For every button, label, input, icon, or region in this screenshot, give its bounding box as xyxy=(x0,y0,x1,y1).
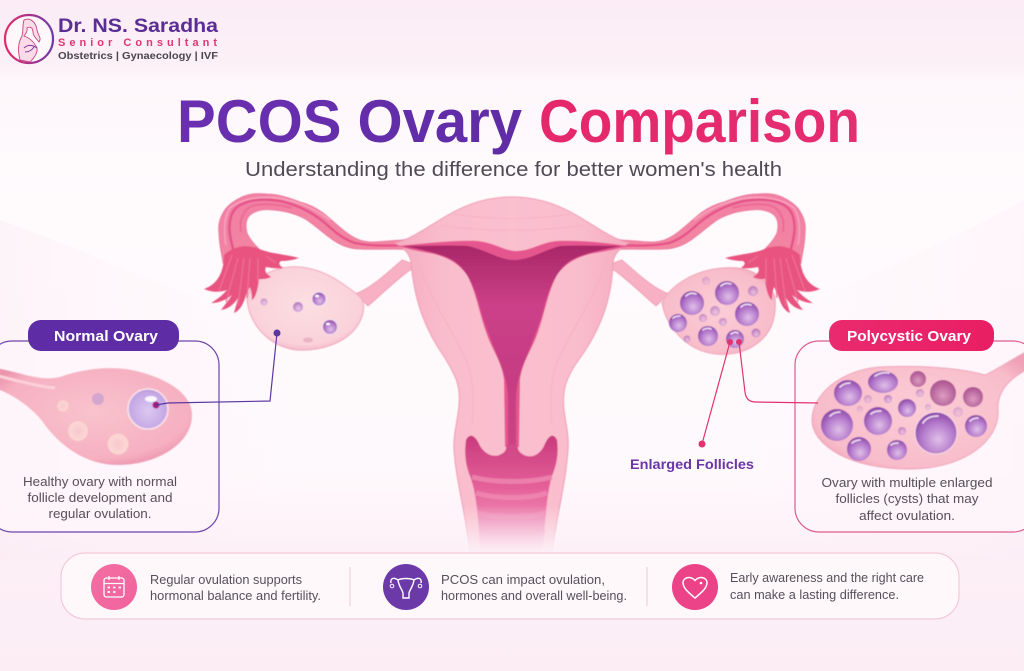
panel pill: Polycystic Ovary xyxy=(847,328,972,345)
bar background xyxy=(61,553,959,619)
enlarged polycystic ovary xyxy=(812,350,1024,469)
panel description: affect ovulation. xyxy=(859,509,955,523)
panel description: follicle development and xyxy=(28,491,173,505)
normal ovary panel xyxy=(0,320,219,532)
panel pill: Normal Ovary xyxy=(54,328,159,345)
item text xyxy=(730,571,924,602)
normal ovary connector xyxy=(156,330,280,405)
item text: PCOS can impact ovulation, xyxy=(441,573,605,587)
subtitle: Understanding the difference for better women's health xyxy=(245,158,782,181)
left ovarian ligament xyxy=(355,260,425,306)
cervix xyxy=(505,445,519,455)
logo emblem: mother xyxy=(5,15,53,63)
panel description: Ovary with multiple enlarged xyxy=(822,476,993,490)
panel frame xyxy=(795,341,1024,532)
divider xyxy=(646,567,648,606)
item text: Early awareness and the right care xyxy=(730,571,924,585)
endometrium band xyxy=(398,241,628,447)
item text xyxy=(150,573,321,603)
lower fade xyxy=(462,505,562,554)
polycystic ovary panel xyxy=(795,320,1024,532)
panel description: regular ovulation. xyxy=(48,507,152,521)
enlarged follicles connectors xyxy=(698,339,818,448)
enlarged normal ovary xyxy=(0,368,192,465)
logo specialties: Obstetrics | Gynaecology | IVF xyxy=(58,50,219,62)
right fallopian tube xyxy=(594,194,820,313)
logo xyxy=(5,15,219,63)
item text: can make a lasting difference. xyxy=(730,588,899,602)
item: PCOS impact xyxy=(383,564,627,610)
item text: Regular ovulation supports xyxy=(150,573,302,587)
follicles xyxy=(260,292,338,342)
uterus body with fundus xyxy=(395,197,629,552)
enlarged follicles label: Enlarged Follicles xyxy=(630,456,754,472)
item: regular ovulation xyxy=(91,564,321,610)
right ovarian ligament xyxy=(599,260,669,306)
item text xyxy=(441,573,627,603)
left fallopian tube xyxy=(204,194,430,313)
panel description: follicles (cysts) that may xyxy=(836,492,979,506)
uterus illustration xyxy=(395,197,629,554)
panel description xyxy=(23,475,177,521)
item: early awareness xyxy=(672,564,924,610)
panel description xyxy=(822,476,993,523)
bottom info bar xyxy=(61,553,959,619)
panel pill xyxy=(28,320,179,351)
vaginal canal xyxy=(465,436,558,552)
logo role: Senior Consultant xyxy=(58,37,217,49)
item text: hormonal balance and fertility. xyxy=(150,589,321,603)
icon: uterus xyxy=(383,564,429,610)
polycystic ovary on uterus xyxy=(662,268,775,354)
title: PCOS Ovary xyxy=(177,88,523,155)
logo name: Dr. NS. Saradha xyxy=(58,16,218,37)
title: Comparison xyxy=(539,88,860,155)
panel frame xyxy=(0,341,219,532)
icon: calendar xyxy=(91,564,137,610)
muscle lines xyxy=(418,214,606,425)
uterine cavity xyxy=(403,246,621,445)
ovary body xyxy=(662,268,775,354)
divider xyxy=(349,567,351,606)
vaginal folds xyxy=(472,477,552,533)
panel description: Healthy ovary with normal xyxy=(23,475,177,489)
item text: hormones and overall well-being. xyxy=(441,589,627,603)
ovary body xyxy=(247,267,364,350)
normal ovary on uterus xyxy=(247,267,364,350)
follicles xyxy=(669,277,760,348)
icon: heart xyxy=(672,564,718,610)
panel pill xyxy=(829,320,994,351)
